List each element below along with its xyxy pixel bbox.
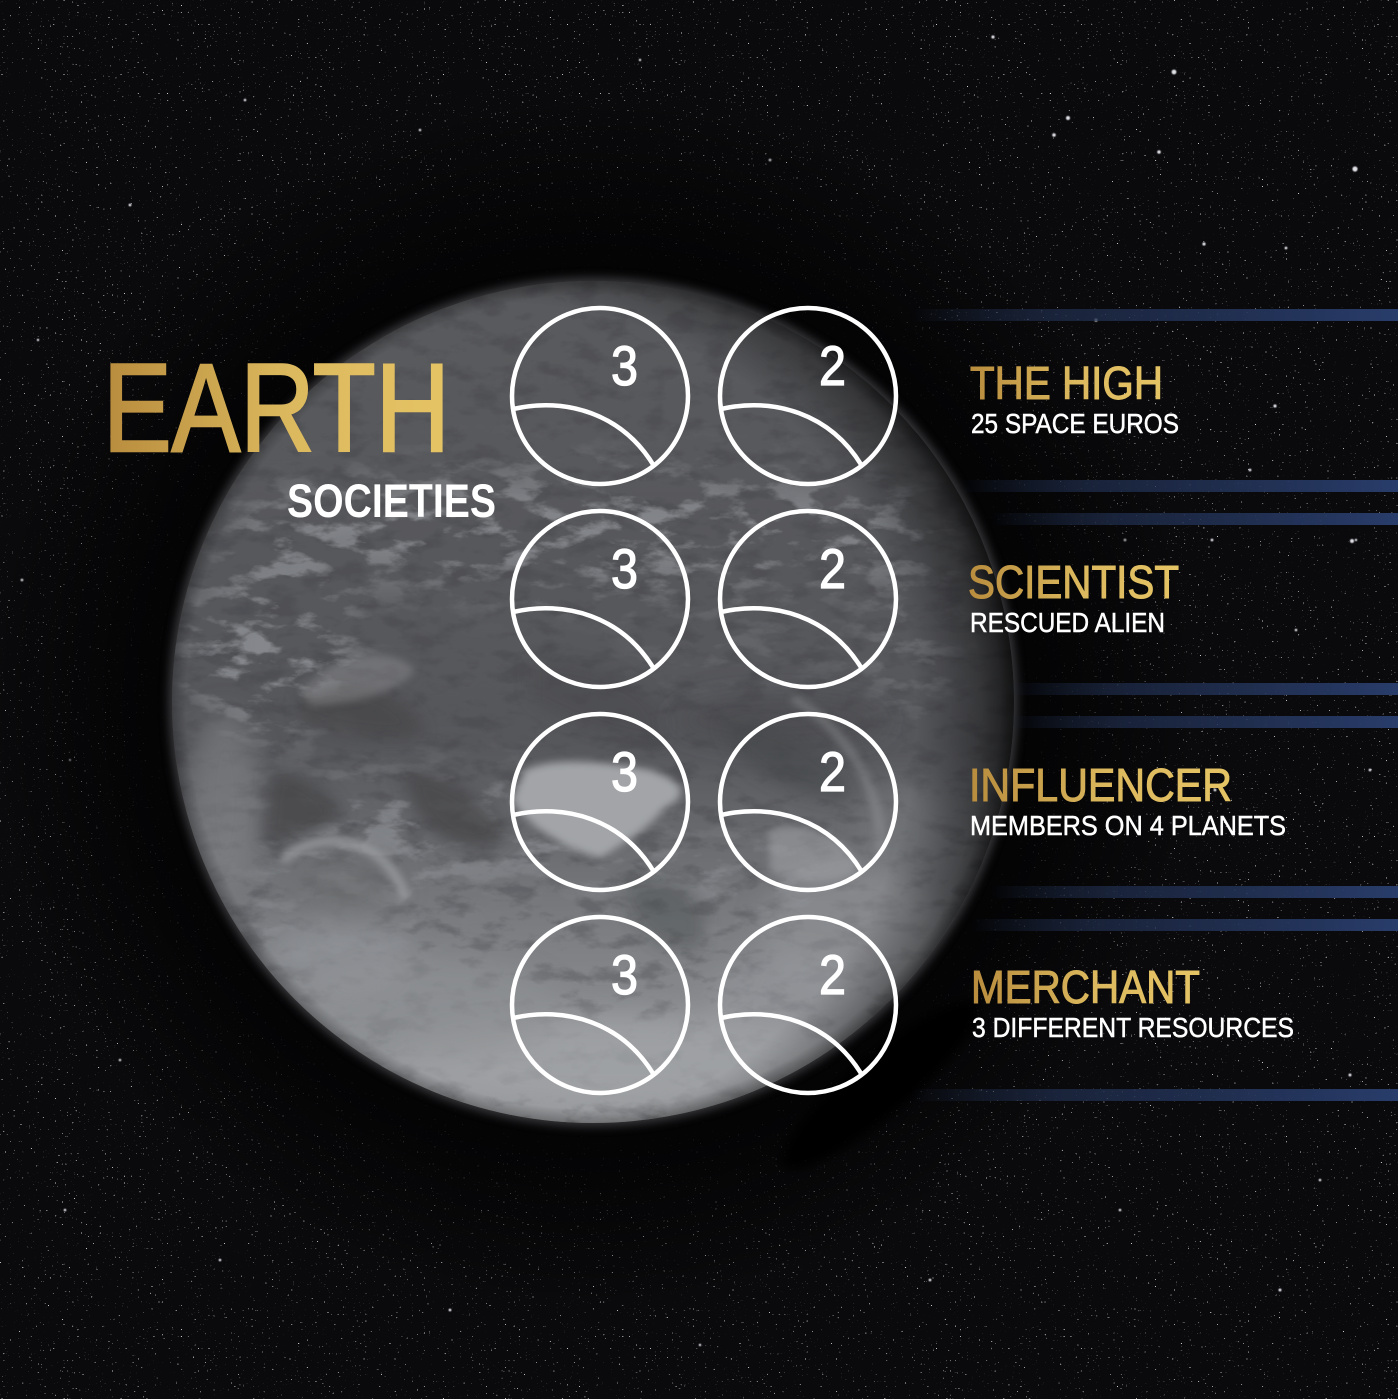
label: Influencer [969,759,1286,841]
blue horizontal bars [910,309,1398,1101]
token row 4 column 1: 3 [611,943,638,1006]
label: Scientist: SCIENTIST [968,556,1179,608]
label: Scientist: RESCUED ALIEN [970,607,1165,638]
label: Merchant: 3 DIFFERENT RESOURCES [972,1012,1294,1043]
token row 3 column 1 [512,714,688,890]
title: EARTH: EARTH [103,339,450,478]
token row 2 column 1: 3 [611,537,638,600]
label: Scientist [968,556,1179,638]
token row 1 column 1: 3 [611,334,638,397]
token row 2 column 2 [720,511,896,687]
token row 3 column 2: 2 [819,740,846,803]
label: The High: THE HIGH [970,357,1163,409]
label: Merchant [971,961,1294,1043]
token row 1 column 1 [512,308,688,484]
label: The High [970,357,1179,439]
token row 1 column 2: 2 [819,334,846,397]
token row 4 column 1 [512,917,688,1093]
label: Merchant: MERCHANT [971,961,1200,1013]
subtitle: SOCIETIES: SOCIETIES [287,474,496,527]
label: The High: 25 SPACE EUROS [971,408,1179,439]
token row 1 column 2 [720,308,896,484]
token row 4 column 2 [720,917,896,1093]
token row 3 column 1: 3 [611,740,638,803]
label: Influencer: MEMBERS ON 4 PLANETS [970,810,1286,841]
token row 2 column 1 [512,511,688,687]
bright cloud mass and swirls [300,655,860,881]
token row 2 column 2: 2 [819,537,846,600]
society tokens grid [512,308,896,1093]
token row 4 column 2: 2 [819,943,846,1006]
dark storm regions [262,660,850,952]
label: Influencer: INFLUENCER [969,759,1232,811]
planet earth [169,278,1017,1188]
token row 3 column 2 [720,714,896,890]
